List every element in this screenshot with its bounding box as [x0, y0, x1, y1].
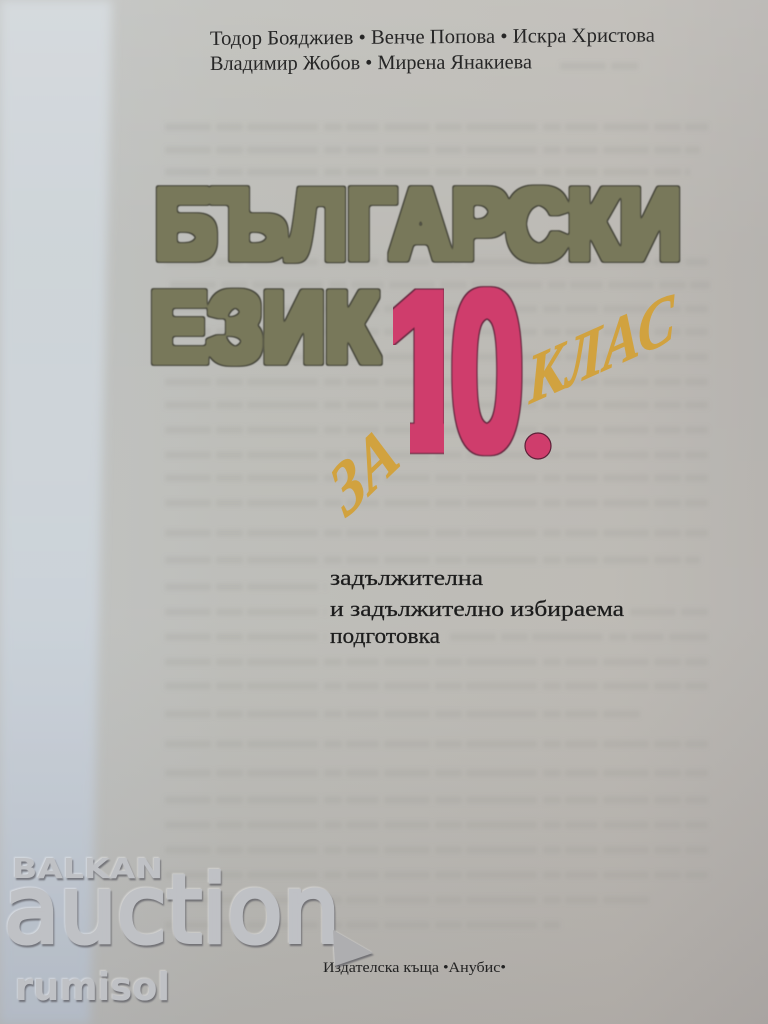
big number 10: 0	[450, 243, 524, 499]
authors: Тодор Бояджиев • Венче Попова • Искра Христова	[210, 25, 655, 50]
authors	[210, 25, 655, 75]
subtitle	[330, 565, 624, 648]
period dot	[525, 433, 551, 459]
watermark arrow	[333, 930, 373, 966]
subtitle: подготовка	[330, 623, 440, 648]
watermark: balkan auction rumisol: BALKAN	[12, 852, 163, 885]
word: klas: КЛАС	[526, 279, 676, 420]
big number 10	[393, 285, 524, 457]
word: za: ЗА	[318, 409, 409, 532]
title line 1: БЪЛГАРСКИ	[155, 169, 681, 279]
subtitle: и задължително избираема	[330, 596, 624, 621]
title line 2: ЕЗИК	[150, 272, 378, 382]
watermark: balkan auction rumisol: auction	[4, 856, 340, 965]
subtitle: задължителна	[330, 565, 483, 590]
watermark: balkan auction rumisol: rumisol	[15, 965, 170, 1009]
big number 10: 1	[378, 243, 472, 499]
authors: Владимир Жобов • Мирена Янакиева	[210, 51, 532, 75]
publisher: Издателска къща •Анубис•	[323, 960, 506, 976]
watermark: balkan auction rumisol	[4, 852, 373, 1009]
